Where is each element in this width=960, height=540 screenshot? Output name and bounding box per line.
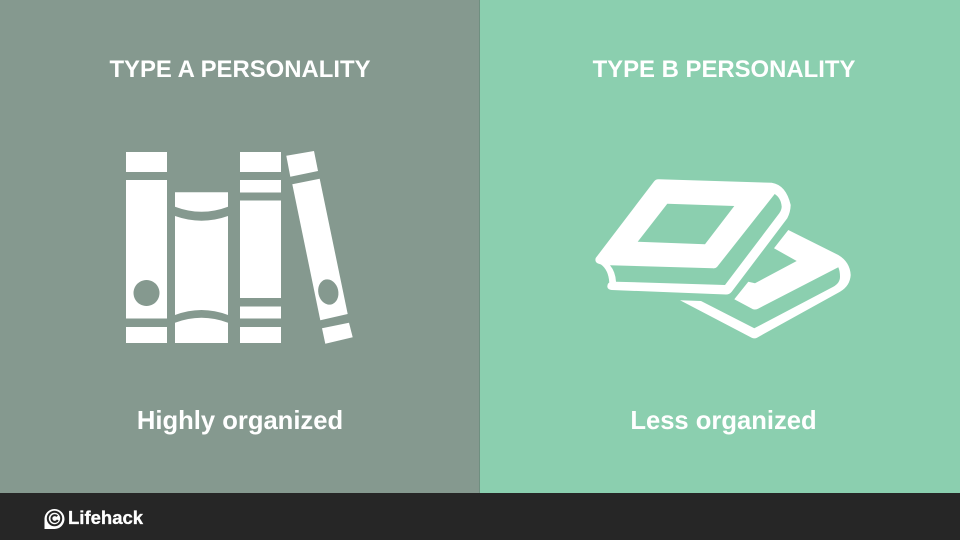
heading: type A: TYPE A PERSONALITY	[109, 56, 371, 83]
panel: type B	[480, 0, 960, 493]
footer bar	[0, 493, 960, 540]
panel: type A	[0, 0, 479, 493]
caption: type A: Highly organized	[137, 407, 343, 435]
logo wordmark: Lifehack	[68, 507, 143, 528]
book 4	[286, 151, 353, 344]
caption: type B: Less organized	[630, 407, 817, 435]
logo	[44, 507, 144, 529]
book 3	[240, 152, 281, 343]
icon: logo mark	[44, 509, 64, 529]
heading: type B: TYPE B PERSONALITY	[593, 56, 855, 83]
panel divider	[479, 0, 480, 493]
book 2	[175, 192, 228, 343]
book 1	[126, 152, 167, 343]
top book	[595, 179, 791, 294]
icon: organized books	[126, 151, 353, 344]
bottom book	[680, 230, 851, 338]
icon: messy books	[595, 179, 851, 338]
